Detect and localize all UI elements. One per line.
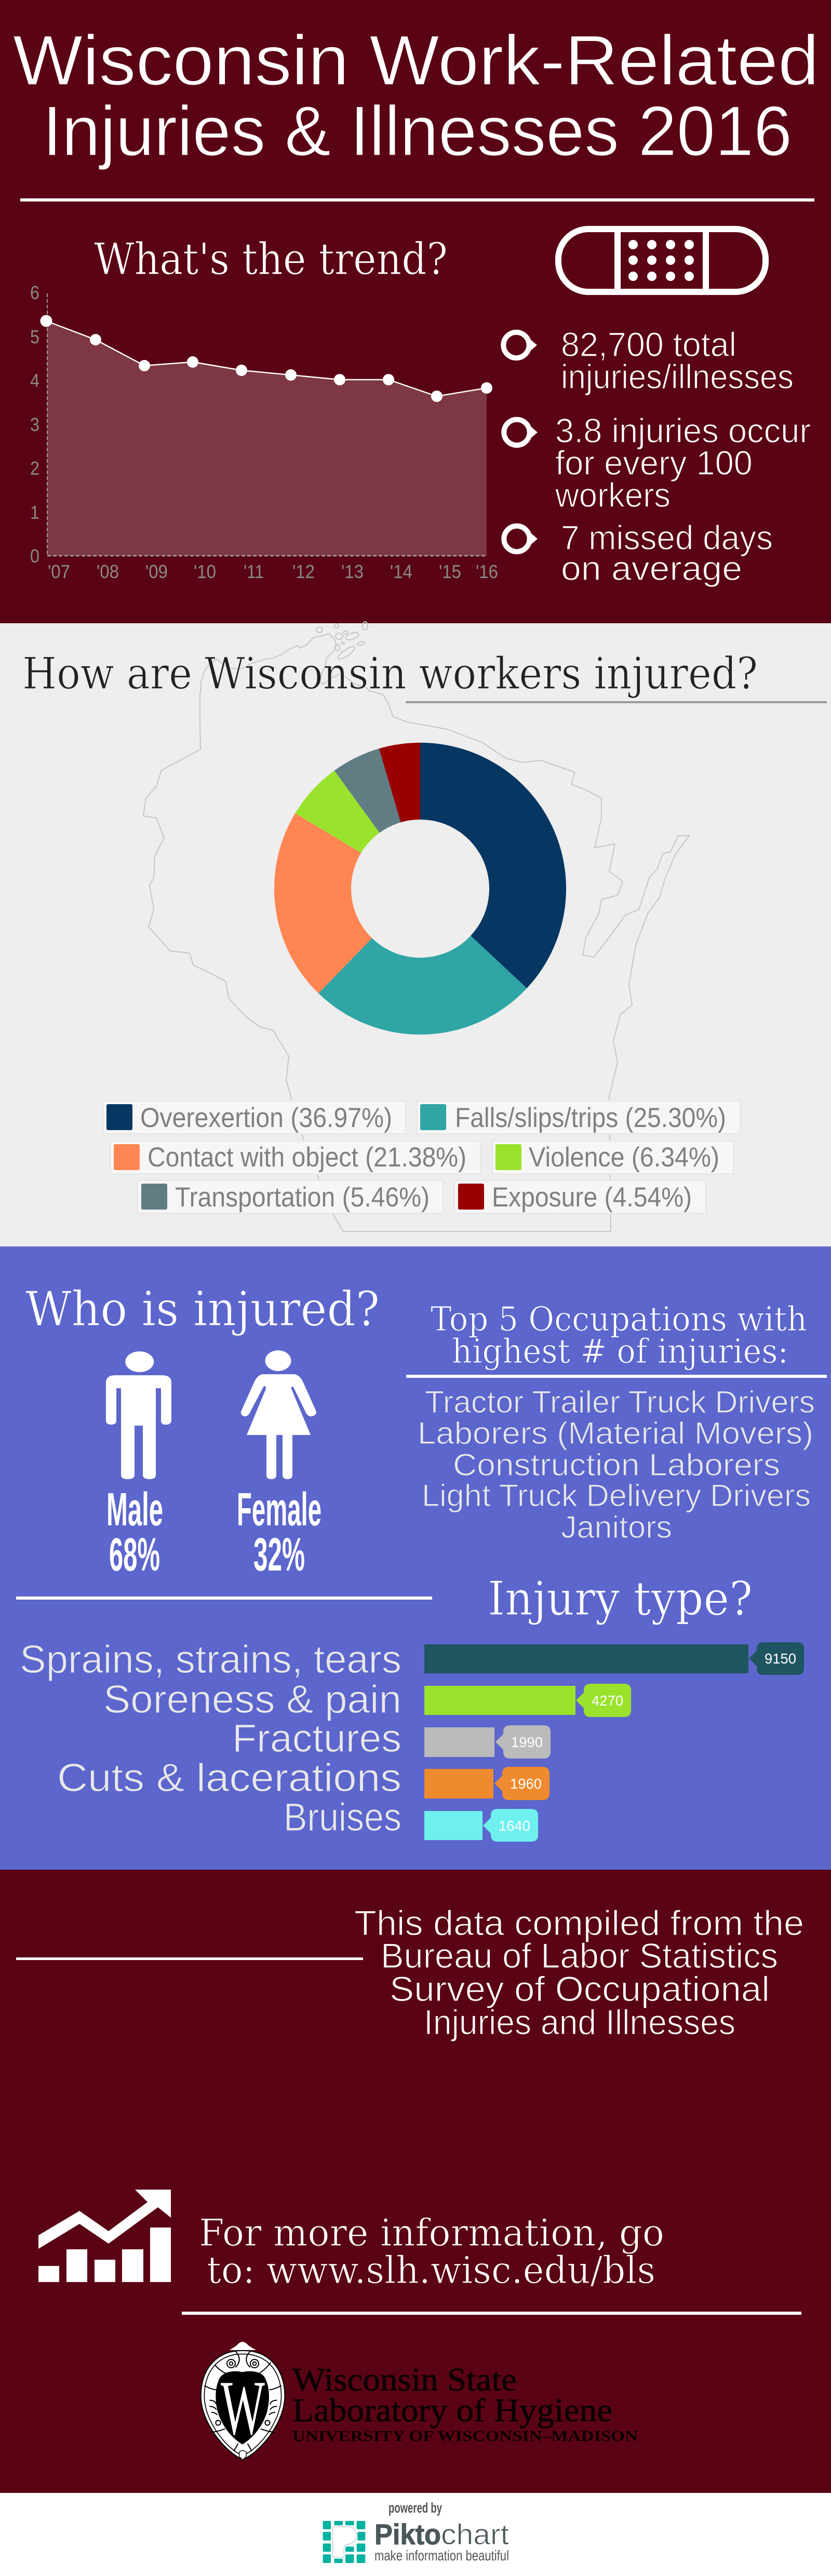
stat: missed days	[504, 518, 773, 587]
list: top occupations: Tractor Trailer Truck Drivers	[425, 1385, 815, 1419]
stat: total injuries: injuries/illnesses	[561, 357, 794, 396]
stat: injury rate: 3.8 injuries occur	[555, 411, 811, 450]
bar: bruises: 1640	[499, 1818, 530, 1834]
icon: female figure	[241, 1350, 316, 1479]
stat: injury rate	[504, 411, 811, 514]
icon: university crest: W	[221, 2365, 265, 2451]
text: data source: Bureau of Labor Statistics	[381, 1936, 778, 1976]
text: Piktochart wordmark: Pikto	[374, 2518, 441, 2551]
bar: fractures: Fractures	[232, 1716, 401, 1761]
bar: cuts	[57, 1756, 549, 1800]
area chart: injury rate trend: 5	[30, 326, 39, 347]
text: laboratory name: Wisconsin State	[292, 2361, 517, 2398]
legend item: overexertion: Overexertion (36.97%)	[140, 1103, 392, 1133]
bar: soreness: 4270	[592, 1693, 623, 1709]
bar: sprains	[20, 1638, 804, 1682]
area chart: injury rate trend: 1	[30, 502, 39, 523]
area chart: injury rate trend: '11	[244, 561, 264, 582]
title: Wisconsin Work-Related	[13, 21, 819, 100]
icon: Piktochart logo	[323, 2521, 365, 2563]
panel: how workers are injured	[0, 622, 831, 1246]
list: top occupations: Janitors	[561, 1510, 672, 1545]
donut chart: causes of injury	[274, 743, 566, 1035]
area chart: injury rate trend: 0	[30, 545, 39, 567]
heading: what's the trend: What's the trend?	[94, 234, 448, 285]
text: data source	[354, 1903, 804, 2042]
legend item: violence: Violence (6.34%)	[529, 1142, 719, 1173]
stat: total injuries: 82,700 total	[561, 325, 736, 364]
heading: injury type: Injury type?	[488, 1572, 753, 1626]
legend item: contact with object: Contact with object (21.38%)	[148, 1142, 466, 1173]
stat: male share: 68%	[109, 1529, 160, 1581]
bar: cuts: Cuts & lacerations	[57, 1756, 401, 1800]
area chart: injury rate trend: 4	[30, 370, 39, 391]
bar: soreness: Soreness & pain	[103, 1678, 401, 1722]
list: top occupations: Laborers (Material Movers)	[418, 1416, 813, 1451]
stat: male share	[106, 1484, 163, 1581]
text: Piktochart wordmark: chart	[441, 2518, 509, 2551]
title	[13, 21, 819, 170]
area chart: injury rate trend	[30, 282, 498, 582]
bar: bruises: Bruises	[284, 1795, 401, 1840]
heading: who is injured: Who is injured?	[25, 1281, 380, 1337]
list: top occupations	[418, 1385, 815, 1545]
stat: female share: Female	[237, 1484, 321, 1536]
icon: male figure	[106, 1351, 171, 1479]
area chart: injury rate trend: '09	[145, 561, 168, 582]
stat: female share: 32%	[253, 1529, 305, 1581]
heading: how are workers injured: How are Wisconsin workers injured?	[22, 648, 758, 699]
text: data source: Injuries and Illnesses	[424, 2003, 735, 2042]
logo: Wisconsin State Laboratory of Hygiene	[201, 2342, 638, 2460]
area chart: injury rate trend: 3	[30, 414, 39, 435]
bar: bruises	[284, 1795, 538, 1842]
map: Wisconsin outline	[143, 622, 689, 1231]
area chart: injury rate trend: '08	[97, 561, 119, 582]
area chart: injury rate trend: '13	[341, 561, 364, 582]
area chart: injury rate trend: '16	[476, 561, 498, 582]
text: more information: to: www.slh.wisc.edu/bls	[207, 2248, 655, 2292]
area chart: injury rate trend: 6	[30, 282, 39, 303]
bar: sprains: Sprains, strains, tears	[20, 1638, 401, 1682]
panel: header and trend	[0, 0, 831, 623]
text: laboratory name: UNIVERSITY OF WISCONSIN–MADISON	[292, 2428, 638, 2445]
text: more information	[199, 2211, 664, 2292]
text: Piktochart wordmark: make information beautiful	[374, 2547, 509, 2564]
bar: sprains: 9150	[765, 1651, 796, 1667]
legend: causes of injury	[103, 1101, 741, 1213]
text: laboratory name: Laboratory of Hygiene	[292, 2392, 612, 2429]
text: data source: Survey of Occupational	[390, 1969, 770, 2009]
legend item: transportation: Transportation (5.46%)	[175, 1182, 430, 1213]
legend item: falls: Falls/slips/trips (25.30%)	[455, 1103, 726, 1133]
panel: who is injured	[0, 1246, 831, 1870]
bar: fractures	[232, 1716, 551, 1761]
panel: footer	[0, 2493, 831, 2576]
text: more information: For more information, go	[199, 2211, 664, 2255]
stat: total injuries	[503, 325, 794, 396]
bar chart: injury type	[20, 1638, 804, 1842]
stat: injury rate: workers	[555, 476, 671, 514]
legend item: exposure: Exposure (4.54%)	[492, 1182, 692, 1213]
icon: rising bar chart	[38, 2190, 171, 2282]
stat: female share	[237, 1484, 321, 1581]
list: top occupations: Light Truck Delivery Drivers	[422, 1478, 811, 1513]
title: Injuries & Illnesses 2016	[43, 91, 792, 170]
heading: top occupations: highest # of injuries:	[452, 1332, 788, 1371]
icon: bandage	[558, 229, 766, 292]
area chart: injury rate trend: '10	[194, 561, 216, 582]
list: top occupations: Construction Laborers	[453, 1447, 780, 1482]
icon: university crest	[201, 2342, 285, 2460]
area chart: injury rate trend: '07	[48, 561, 70, 582]
text: data source: This data compiled from the	[354, 1903, 804, 1943]
area chart: injury rate trend: '12	[292, 561, 315, 582]
heading: top occupations: Top 5 Occupations with	[431, 1300, 807, 1339]
stat: injury rate: for every 100	[555, 444, 753, 482]
stat: missed days: on average	[561, 549, 742, 587]
bar: soreness	[103, 1678, 631, 1722]
text: powered by: powered by	[388, 2500, 442, 2516]
area chart: injury rate trend: '14	[390, 561, 412, 582]
stat: missed days: 7 missed days	[561, 518, 773, 557]
area chart: injury rate trend: 2	[30, 458, 39, 479]
panel: sources and more information	[0, 1870, 831, 2493]
area chart: injury rate trend: '15	[439, 561, 461, 582]
text: laboratory name	[292, 2361, 638, 2445]
heading: top occupations	[431, 1300, 807, 1371]
text: Piktochart wordmark	[374, 2518, 509, 2564]
bar: cuts: 1960	[510, 1776, 542, 1792]
bar: fractures: 1990	[511, 1734, 543, 1750]
stat: male share: Male	[106, 1484, 163, 1536]
